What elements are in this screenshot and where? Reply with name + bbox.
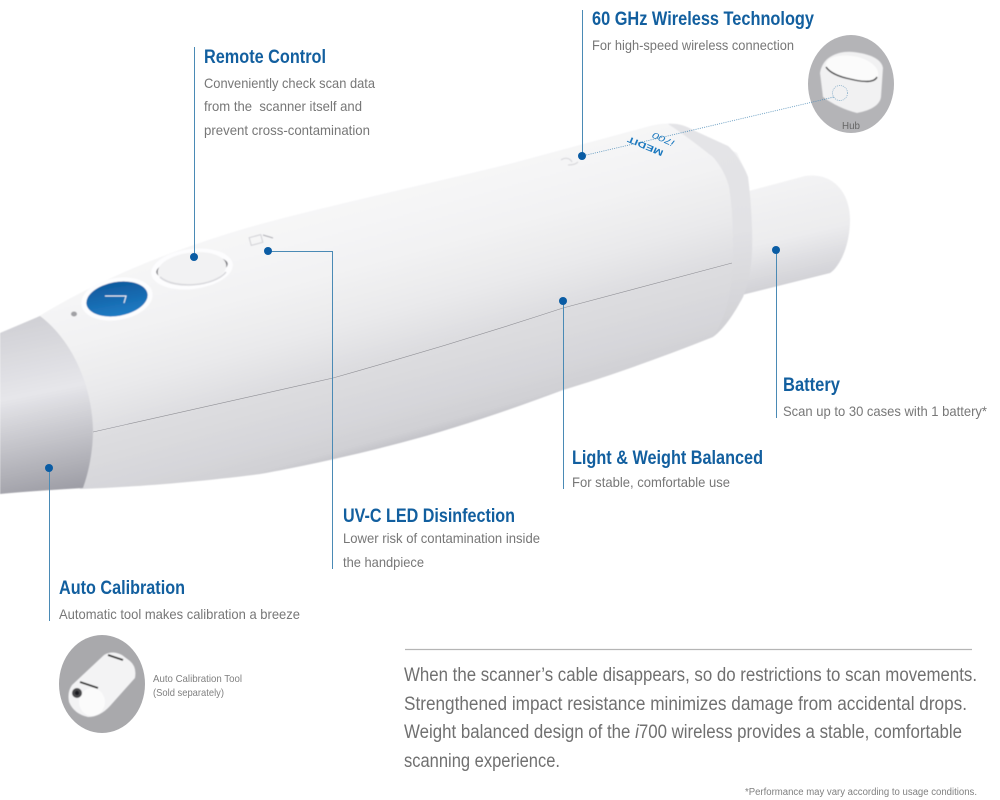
hub device [820,52,883,113]
auto calibration tool inset [59,635,242,733]
callout: Remote Control: Remote Control [204,47,326,68]
callout: UV-C LED Disinfection: UV-C LED Disinfection [343,506,515,527]
handpiece shapes [0,124,850,494]
callout: Battery: Battery [783,375,840,396]
callout: 60 GHz Wireless Technology [578,9,814,160]
hub label: Hub [842,121,860,132]
scanner brand mark: i700 [650,130,676,148]
auto calibration tool inset: (Sold separately) [153,687,224,699]
scanner illustration [0,124,850,494]
callout: Remote Control [190,47,375,261]
rear collar [668,124,752,337]
callout: Auto Calibration [45,464,300,622]
callout: Auto Calibration: Automatic tool makes calibration a breeze [59,606,300,622]
blue button [78,272,156,326]
tool circle [59,635,145,733]
hub inset [808,35,894,133]
icon: UV-C mark [249,235,273,245]
status light [71,312,77,316]
callout: UV-C LED Disinfection: the handpiece [343,554,424,570]
callout: Remote Control: from the scanner itself and [204,98,362,114]
callout: Remote Control: prevent cross-contamination [204,122,370,138]
calibration nose [0,316,93,494]
dotted link to hub [582,97,834,156]
callout: Light & Weight Balanced: For stable, comfortable use [572,474,730,490]
callout: 60 GHz Wireless Technology: For high-speed wireless connection [592,37,794,53]
handpiece body [36,124,752,489]
scanner brand mark [625,130,676,158]
divider [405,648,972,650]
remote control button [149,244,235,294]
callout: Battery [772,246,988,419]
callout: UV-C LED Disinfection: Lower risk of contamination inside [343,530,540,546]
icon: wireless mark [561,158,578,165]
tool caption: Auto Calibration Tool [153,673,242,685]
battery [738,176,850,296]
tool device [68,652,135,717]
callout: Remote Control: Conveniently check scan data [204,75,375,91]
summary paragraph: Weight balanced design of the i700 wireless provides a stable, comfortable [404,722,962,743]
callout: Light & Weight Balanced [559,297,763,490]
hub sensor circle [832,86,848,100]
callout: 60 GHz Wireless Technology: 60 GHz Wireless Technology [592,9,814,30]
body seam [93,263,732,432]
scanner brand mark: MEDIT [625,134,665,158]
callout: Auto Calibration: Auto Calibration [59,578,185,599]
summary paragraph [404,665,977,772]
hub circle [808,35,894,133]
summary paragraph: scanning experience. [404,751,560,772]
callout: Battery: Scan up to 30 cases with 1 battery* [783,403,988,419]
callout: Light & Weight Balanced: Light & Weight Balanced [572,448,763,469]
callout: UV-C LED Disinfection [264,247,540,570]
footnote: *Performance may vary according to usage conditions. [745,787,977,798]
